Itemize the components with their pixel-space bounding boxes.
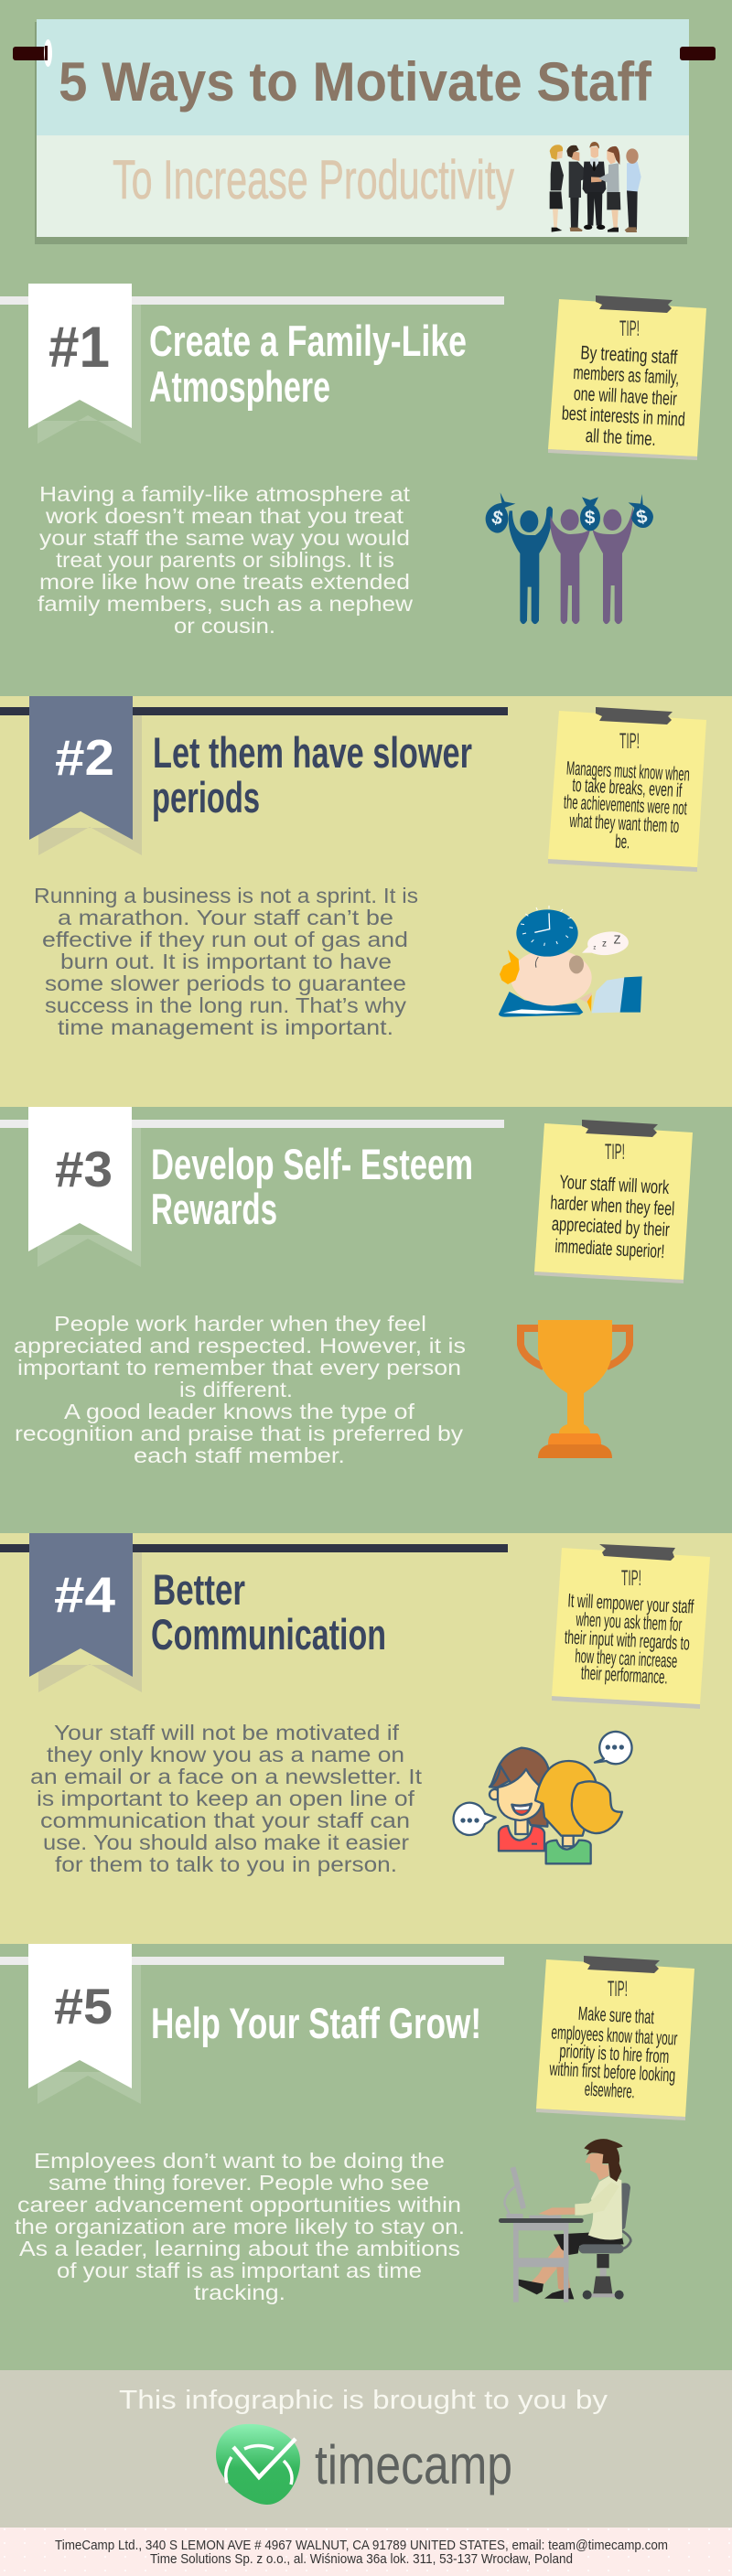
bar [0,1957,504,1965]
tip note: TIP! [619,729,640,754]
number: #5 [54,1978,113,2034]
tip note: By treating staff [580,342,678,369]
ribbon shadow [38,1965,141,2104]
body text: work doesn’t mean that you treat [45,504,404,528]
tip note: elsewhere. [584,2079,635,2102]
icon: people holding money bags: $ [634,506,650,529]
body text: People work harder when they feel [54,1312,426,1336]
body text: is different. [179,1378,293,1401]
body text: Running a business is not a sprint. It is [34,884,418,907]
ribbon shadow [38,305,141,444]
bar [0,296,504,305]
ribbon [28,1944,132,2088]
icon: timecamp logo [216,2424,300,2505]
panel background [0,696,732,1107]
header banner [13,19,716,244]
number: #2 [55,729,114,786]
panel background [0,1944,732,2370]
icon: trophy [521,1320,630,1458]
body text [14,1312,466,1467]
ribbon shadow [38,1552,142,1692]
tip note [534,1120,693,1283]
tip note: one will have their [573,383,677,410]
heading: Let them have slower [153,728,472,777]
tip note: immediate superior! [554,1236,665,1262]
body text: As a leader, learning about the ambitions [19,2237,460,2260]
bar [0,1120,504,1128]
tip note: TIP! [608,1977,628,2002]
tip note: harder when they feel [550,1192,675,1220]
footer address band [0,2528,732,2576]
title: 5 Ways to Motivate Staff [59,51,652,113]
tip note [548,707,706,872]
icon: person sleeping under a clock: Z [614,933,621,946]
sponsor line: This infographic is brought to you by [119,2386,608,2415]
footer sponsor band [0,2370,732,2528]
number: #1 [48,316,110,380]
body text [34,884,418,1039]
body text: success in the long run. That’s why [45,993,407,1017]
body text [38,482,413,638]
tip note [552,1544,710,1709]
body text: a marathon. Your staff can’t be [58,906,393,929]
tip note: TIP! [619,317,640,341]
heading: Communication [151,1610,386,1658]
logo wordmark: timecamp [315,2434,512,2496]
ribbon [29,696,133,840]
section 2 [0,696,732,1107]
body text [15,2149,465,2304]
icon: person sleeping under a clock: z [593,946,596,951]
body text: or cousin. [174,614,275,638]
body text: time management is important. [58,1015,393,1039]
body text: career advancement opportunities within [17,2193,461,2216]
section 5 [0,1944,732,2370]
bar [0,707,508,715]
body text: Having a family-like atmosphere at [39,482,411,506]
body text: is important to keep an open line of [37,1787,415,1810]
body text: treat your parents or siblings. It is [56,548,394,572]
section 4 [0,1533,732,1944]
tip note: Your staff will work [559,1172,670,1198]
ribbon [28,284,132,428]
heading: Develop Self- Esteem [151,1140,473,1188]
body text: the organization are more likely to stay on. [15,2215,465,2238]
body text: use. You should also make it easier [43,1830,409,1854]
ribbon shadow [38,1128,141,1267]
heading [152,728,472,821]
ribbon shadow [38,715,142,855]
body text: A good leader knows the type of [64,1400,415,1423]
icon: business people [550,142,641,232]
heading: Create a Family-Like [149,317,467,365]
tip note: TIP! [605,1140,625,1165]
number: #4 [54,1566,115,1623]
heading: periods [152,773,260,821]
body text: tracking. [194,2281,285,2304]
panel background [0,1107,732,1533]
icon: two women talking [454,1732,632,1863]
heading [149,317,467,411]
tip note: TIP! [621,1566,641,1591]
tip note: be. [615,832,630,853]
body text: effective if they run out of gas and [42,928,408,951]
heading: Atmosphere [149,362,330,411]
body text: some slower periods to guarantee [45,971,406,995]
body text: communication that your staff can [40,1809,410,1832]
body text: of your staff is as important as time [57,2259,422,2282]
section 1 [0,284,706,638]
tip note [536,1956,694,2120]
heading [151,1140,473,1233]
tip note: appreciated by their [551,1214,670,1240]
section 3 [0,1107,732,1533]
heading: Better [153,1565,245,1614]
body text: Employees don’t want to be doing the [34,2149,445,2173]
panel background [0,1533,732,1944]
icon: people holding money bags: $ [585,508,596,529]
tip note [548,295,706,460]
tip note: all the time. [585,425,656,450]
icon: people holding money bags [486,492,653,624]
body text: they only know you as a name on [47,1743,404,1766]
body text: same thing forever. People who see [48,2171,429,2195]
body text: an email or a face on a newsletter. It [30,1765,423,1788]
body text: important to remember that every person [17,1356,461,1379]
body text [30,1721,423,1876]
ribbon [29,1533,133,1677]
page background [0,0,732,696]
body text: for them to talk to you in person. [55,1852,397,1876]
tip note: Make sure that [577,2003,654,2028]
footer address band: Time Solutions Sp. z o.o., al. Wiśniowa 36a lok. 311, 53-137 Wrocław, Poland [150,2551,573,2567]
body text: burn out. It is important to have [60,950,392,973]
ribbon [28,1107,132,1251]
body text: more like how one treats extended [39,570,410,594]
icon: people holding money bags: $ [490,507,505,530]
body text: your staff the same way you would [39,526,410,550]
body text: appreciated and respected. However, it is [14,1334,466,1358]
icon: woman working at a desk [499,2139,630,2302]
icon: person sleeping under a clock: z [602,939,607,950]
heading: Rewards [151,1185,277,1233]
body text: family members, such as a nephew [38,592,413,616]
body text: Your staff will not be motivated if [54,1721,400,1744]
bar [0,1544,508,1552]
subtitle: To Increase Productivity [113,149,514,210]
footer address band: TimeCamp Ltd., 340 S LEMON AVE # 4967 WALNUT, CA 91789 UNITED STATES, email: team@timecamp.com [55,2538,668,2553]
number: #3 [55,1141,113,1197]
icon: person sleeping under a clock [499,906,642,1017]
body text: each staff member. [134,1444,345,1467]
heading: Help Your Staff Grow! [151,1999,481,2047]
body text: recognition and praise that is preferred by [15,1422,464,1445]
heading [151,1565,386,1658]
